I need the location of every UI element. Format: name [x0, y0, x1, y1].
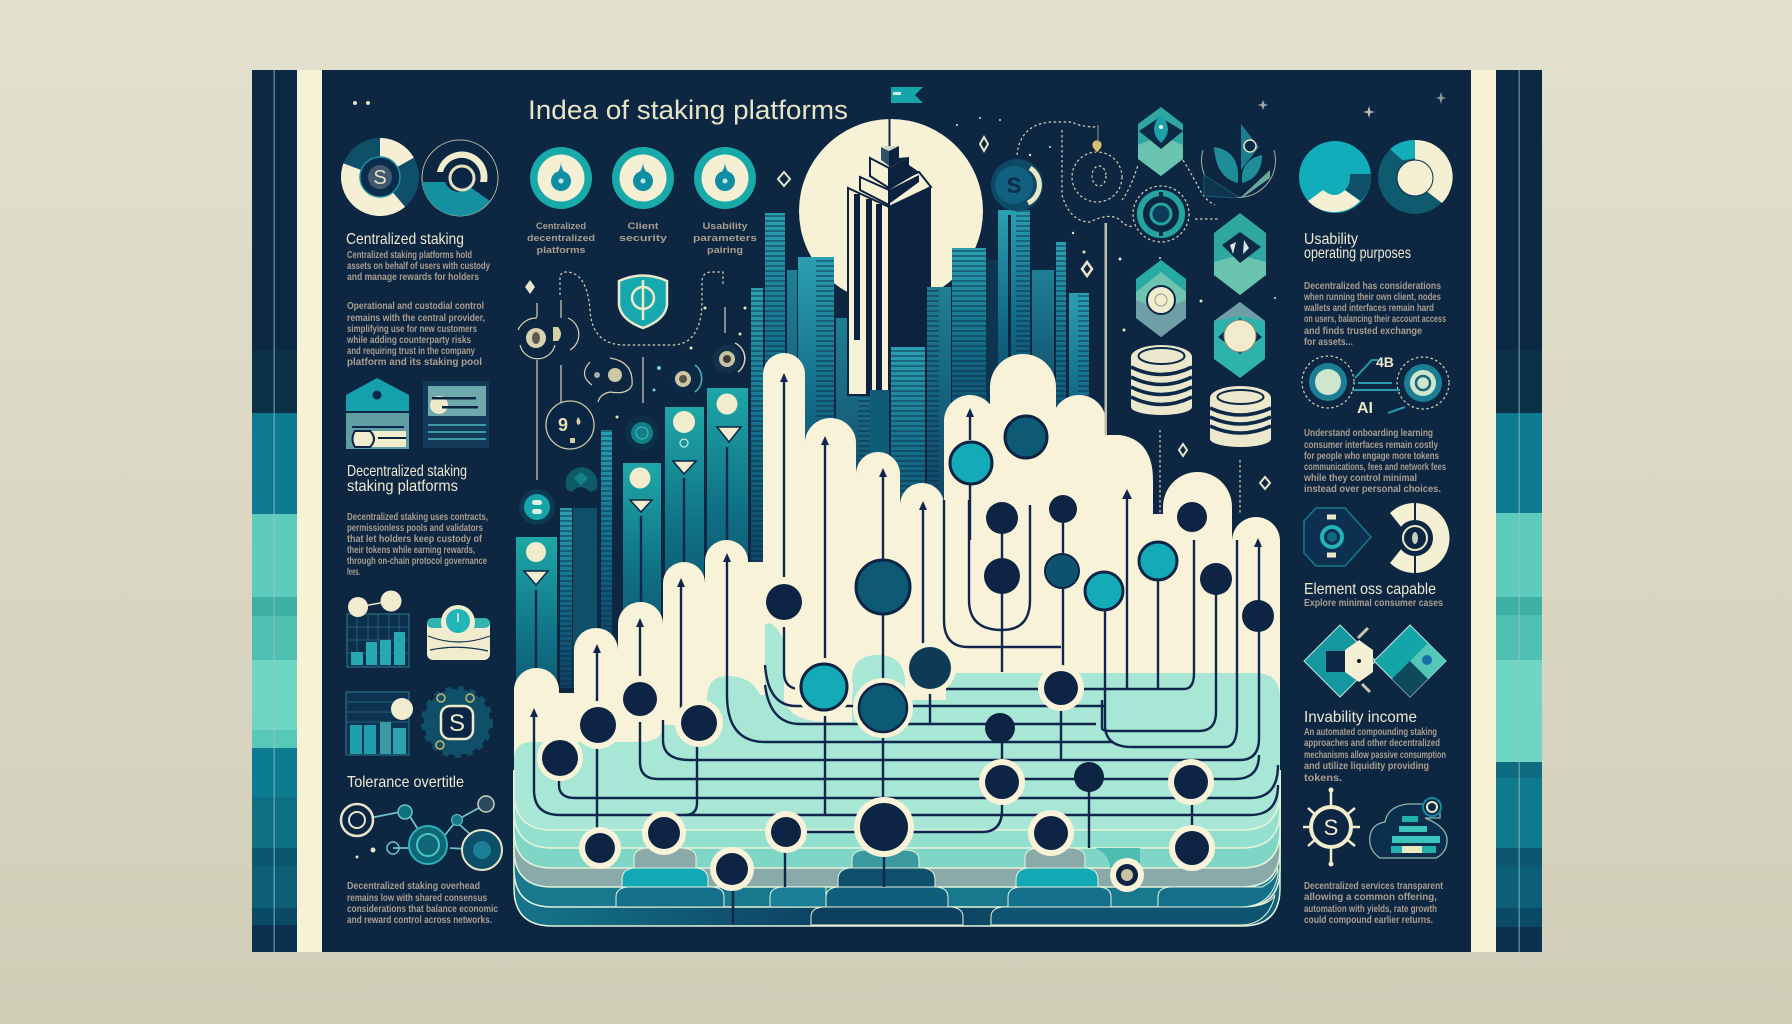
- icon: hexagon coin 2: [1214, 302, 1265, 378]
- panel: left cream band: [297, 70, 322, 952]
- badge labels: parameters: [693, 233, 757, 244]
- stepped bars left: [516, 388, 748, 707]
- icon: S coin on tower: S: [1007, 173, 1021, 198]
- text block: centralized intro: [347, 250, 490, 283]
- text block: tolerance details: considerations that balance economic: [347, 904, 498, 915]
- icon: cream pie: [1378, 140, 1453, 214]
- text block: centralized details: remains with the central provider,: [347, 313, 485, 324]
- text block: invability: tokens.: [1304, 773, 1342, 784]
- icon: paired wallets: AI: [1357, 400, 1373, 417]
- text block: usability: for assets...: [1304, 337, 1353, 348]
- icon: S wheel: S: [1324, 815, 1338, 840]
- text block: decentralized details: their tokens while earning rewards,: [347, 545, 475, 556]
- heading: centralized staking: Centralized staking: [346, 231, 464, 248]
- panel: right colour strip: [1496, 70, 1542, 952]
- text block: decentralized details: permissionless pools and validators: [347, 523, 483, 534]
- text block: centralized details: simplifying use for new customers: [347, 324, 477, 335]
- icon: ring chart: [422, 140, 498, 216]
- circuit nodes: [537, 416, 1274, 892]
- panel: left colour strip: [252, 70, 297, 952]
- skyline buildings: [751, 213, 870, 588]
- text block: decentralized details: [347, 512, 488, 578]
- text block: usability second: while they control minimal: [1303, 473, 1417, 484]
- icon: cloud stack: [1370, 798, 1447, 858]
- badge labels: decentralized: [527, 233, 595, 244]
- icon: coin on layered stack: [427, 605, 490, 660]
- text block: centralized details: and requiring trust in the company: [347, 346, 475, 357]
- icon: tag card: [346, 378, 409, 449]
- text block: invability: An automated compounding staking: [1304, 727, 1437, 738]
- text block: usability second: consumer interfaces remain costly: [1304, 440, 1438, 451]
- text block: usability: when running their own client, nodes: [1303, 292, 1441, 303]
- panel: right cream band: [1471, 70, 1496, 952]
- text block: decentralized details: that let holders keep custody of: [347, 534, 483, 545]
- text block: invability: [1304, 727, 1446, 784]
- text block: tolerance details: remains low with shared consensus: [347, 893, 487, 904]
- stacked mounds: [616, 848, 1278, 925]
- dashed connector right: [1017, 122, 1240, 513]
- heading: decentralized staking: Decentralized staking: [347, 463, 467, 480]
- icon: coin stack 1: [1131, 345, 1192, 415]
- heading: usability: Usability: [1304, 231, 1358, 248]
- text block: invability: and utilize liquidity providing: [1304, 761, 1429, 772]
- left column: decorative dots: [353, 101, 370, 105]
- text block: centralized details: [346, 301, 485, 368]
- heading: usability: [1304, 231, 1411, 262]
- heading: element capable: Element oss capable: [1304, 581, 1436, 598]
- text block: bottom right: could compound earlier returns.: [1304, 915, 1433, 926]
- small diamonds: [525, 92, 1446, 489]
- icon: growth chart with coins: [347, 590, 409, 667]
- text block: usability second: [1303, 428, 1446, 495]
- badge labels: Centralized: [536, 221, 586, 232]
- text block: tolerance details: and reward control across networks.: [347, 915, 492, 926]
- text block: tolerance details: Decentralized staking overhead: [347, 881, 480, 892]
- text block: usability: [1303, 281, 1446, 348]
- icon: interface card: [423, 381, 489, 448]
- icon: cream disc: [1390, 503, 1449, 573]
- badge labels: Usability: [702, 221, 748, 232]
- title: Indea of staking platforms: [528, 95, 848, 125]
- mint field: [514, 623, 1280, 900]
- text block: invability: mechanisms allow passive consumption: [1304, 750, 1446, 761]
- left node cluster: [518, 300, 745, 525]
- icon: S coin on tower: [991, 159, 1043, 211]
- text block: bottom right: [1304, 881, 1444, 926]
- central skyscraper with flag: [848, 87, 931, 395]
- heading: decentralized staking: staking platforms: [347, 478, 458, 495]
- text block: centralized details: platform and its staking pool: [347, 357, 482, 368]
- text block: usability: wallets and interfaces remain hard: [1303, 303, 1434, 314]
- badge labels: pairing: [707, 245, 743, 256]
- text block: centralized details: Operational and custodial control: [347, 301, 484, 312]
- text block: invability: approaches and other decentralized: [1304, 738, 1440, 749]
- text block: bottom right: allowing a common offering,: [1304, 892, 1437, 903]
- heading: decentralized staking: [347, 463, 467, 495]
- icon: paired wallets: 4B: [1376, 354, 1394, 370]
- icon: octagon chip: [1304, 508, 1371, 566]
- text block: bottom right: Decentralized services transparent: [1304, 881, 1444, 892]
- badge labels: Client: [628, 221, 659, 232]
- text block: usability second: for people who engage more tokens: [1304, 451, 1439, 462]
- text block: element subline: Explore minimal consumer cases: [1304, 598, 1443, 609]
- text block: usability: and finds trusted exchange: [1304, 326, 1422, 337]
- moon: [799, 119, 983, 303]
- text block: bottom right: automation with yields, rate growth: [1304, 904, 1437, 915]
- text block: usability second: Understand onboarding learning: [1304, 428, 1433, 439]
- text block: decentralized details: fees.: [347, 567, 360, 578]
- icon: coin stack 2: [1210, 386, 1271, 447]
- skyline buildings right: [870, 210, 1089, 567]
- icon: dashed ring pin: [1072, 125, 1122, 202]
- icon: shield: [619, 276, 667, 328]
- icon: ring target: [1133, 186, 1189, 242]
- text block: usability: Decentralized has considerations: [1304, 281, 1441, 292]
- text block: usability: on users, balancing their account access: [1304, 314, 1446, 325]
- icon: aqua pie: [1299, 141, 1371, 213]
- left node cluster: 9: [558, 415, 568, 435]
- icon: hexagon layers: [1214, 213, 1266, 295]
- heading: usability: operating purposes: [1304, 245, 1411, 262]
- icon: S donut: S: [373, 167, 387, 189]
- dashed connector left: [560, 272, 723, 345]
- panel: main navy background: [322, 70, 1471, 952]
- text block: decentralized details: through on-chain protocol governance: [347, 556, 487, 567]
- badge labels: [527, 221, 757, 256]
- text block: centralized details: while adding counterparty risks: [346, 335, 471, 346]
- icon: S wheel: [1303, 788, 1360, 866]
- icon: bar chart with coin: [346, 692, 413, 755]
- text block: usability second: instead over personal choices.: [1304, 484, 1441, 495]
- icon: S donut: [339, 136, 421, 218]
- text block: decentralized details: Decentralized staking uses contracts,: [347, 512, 488, 523]
- badge labels: security: [619, 233, 668, 244]
- arrow heads: [530, 223, 1262, 717]
- icon: S gear badge: S: [449, 710, 465, 737]
- layered base bands: [514, 770, 1280, 926]
- badge labels: platforms: [536, 245, 586, 256]
- icon: S gear badge: [424, 689, 490, 755]
- text block: centralized intro: assets on behalf of users with custody: [347, 261, 490, 272]
- cream arches: [514, 353, 1280, 790]
- circuit lines: [534, 377, 1278, 924]
- icon: node network: [341, 796, 502, 870]
- icon: paired wallets: [1302, 354, 1449, 417]
- icon: hexagon coin: [1136, 260, 1186, 337]
- text block: centralized intro: Centralized staking platforms hold: [347, 250, 472, 261]
- icon: three coin badges: [530, 147, 756, 209]
- text block: usability second: communications, fees and network fees: [1304, 462, 1446, 473]
- text block: tolerance details: [347, 881, 498, 926]
- icon: hexagon leaf: [1138, 107, 1183, 176]
- text block: centralized intro: and manage rewards for holders: [347, 272, 479, 283]
- heading: tolerance: Tolerance overtitle: [347, 774, 464, 791]
- heading: invability income: Invability income: [1304, 709, 1417, 726]
- icon: linked diamonds: [1304, 625, 1446, 697]
- icon: plant badge: [1202, 124, 1276, 198]
